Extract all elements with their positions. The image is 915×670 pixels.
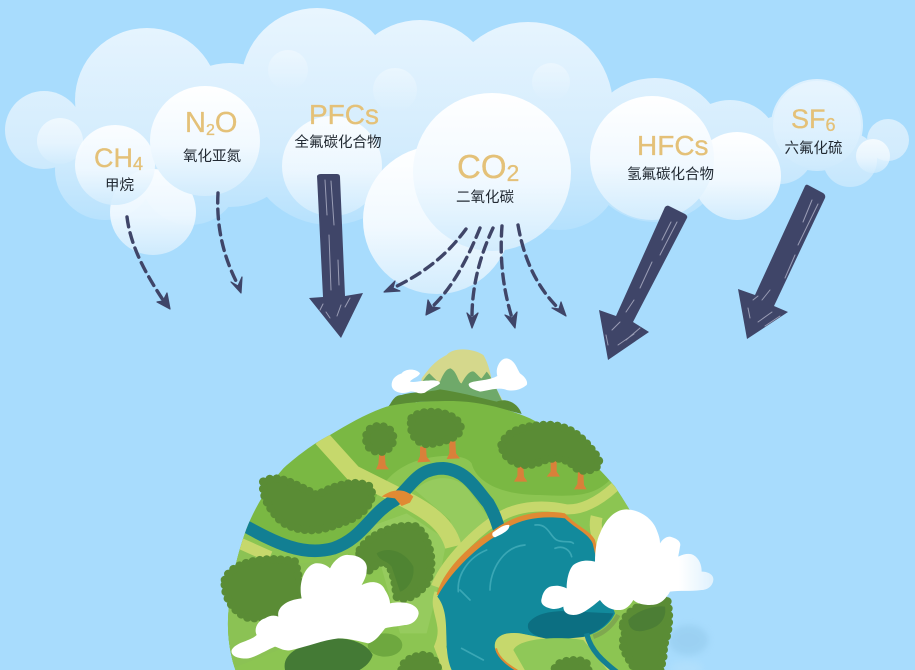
globe ground [220,397,687,670]
summit cloud right [469,358,527,392]
trunks [376,440,587,489]
mountain [417,349,503,403]
tree: left block [225,559,301,618]
right cloud [541,509,713,615]
globe illustration [220,349,713,670]
river [243,468,500,551]
label: CO2: 2 [506,160,519,186]
label: N2O: O [215,107,237,139]
left cloud [231,555,419,659]
label: SF6: SF [791,104,826,134]
label: HFCs: HFCs [637,130,709,161]
lake ripples [458,525,573,660]
tree: right column [623,598,669,670]
tree shade: right column [628,606,665,631]
olive strip by lake [593,615,618,637]
thick arrow: PFCs [309,174,363,338]
outlet stream [587,633,618,670]
label: 全氟碳化合物: 全氟碳化合物 [294,133,382,151]
ground shading [220,456,687,670]
dashed arrow: CO2 left [384,229,466,292]
tree: bottom centre [402,655,438,670]
label: N2O: N [185,107,206,139]
lake shore [437,512,603,595]
label: 六氟化硫: 六氟化硫 [784,140,842,157]
dashed arrow: CO2 lower left [426,228,480,315]
label: SF6: 6 [826,115,836,135]
lake deep patch [528,611,613,640]
shadow behind globe [668,625,708,670]
summit cloud left [392,370,440,393]
back cloud bank [5,8,909,230]
label: CH4: CH [94,143,133,173]
waterfall foam [492,525,509,537]
dashed arrow: N2O [218,193,242,293]
tree: double crown [411,412,461,444]
dashed arrow: CO2 centre right [501,226,517,328]
bush: centre right [368,633,402,657]
tree shade: horseshoe [377,550,414,592]
cloud highlights [268,50,570,112]
label: 氢氟碳化合物: 氢氟碳化合物 [627,166,714,183]
tree: left crescent [263,479,372,530]
thick arrow: SF6 [738,185,825,339]
tree line on summit [388,389,522,414]
south shore [495,633,620,670]
shore orange [496,648,522,670]
lake [437,517,615,670]
dashed arrow: CO2 centre left [467,228,493,328]
bridge [382,490,413,506]
tree: long crown [502,425,599,470]
cloud puffs [37,81,890,294]
thick arrow: HFCs [599,206,687,360]
tree: small [366,426,393,452]
label: CH4: 4 [133,154,143,174]
label: 二氧化碳: 二氧化碳 [456,189,514,206]
dashed arrow: CH4 [127,217,170,309]
tree: bottom dark [285,638,373,670]
label: PFCs: PFCs [309,99,379,130]
tree: south bay [555,660,588,670]
tree: horseshoe [360,526,431,599]
label: CO2: CO [457,148,506,185]
label: N2O: 2 [206,122,215,139]
roads [240,438,615,670]
label: 甲烷: 甲烷 [105,177,134,194]
label: 氧化亚氮: 氧化亚氮 [183,148,241,165]
dashed arrow: CO2 right [518,225,566,316]
